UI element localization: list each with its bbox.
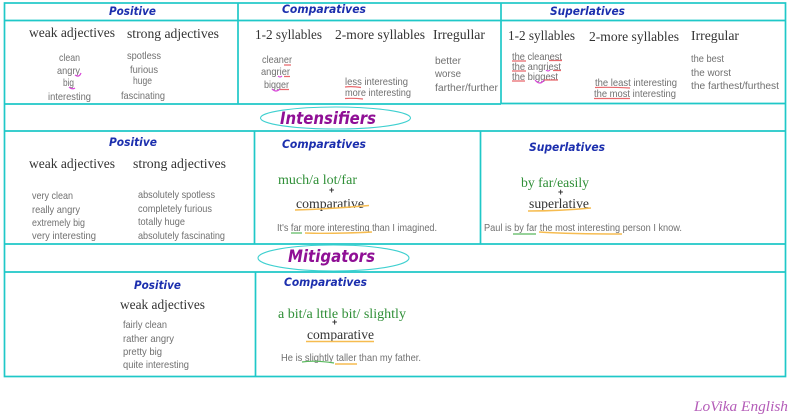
long comparatives list: more interesting — [345, 87, 411, 99]
formula: a bit a little bit slightly plus comparative: a bit/a lttle bit/ slightly — [278, 306, 406, 321]
heading: positive: Positive — [109, 135, 157, 149]
column heads: syllables and irregular — [508, 28, 740, 44]
title: mitigators — [258, 245, 409, 271]
example sentence: It's far more interesting than I imagined. — [277, 222, 437, 234]
heading: comparatives: Comparatives — [284, 275, 367, 289]
panel: intensifiers superlatives — [484, 140, 682, 234]
heading: positive: Positive — [134, 278, 181, 292]
heading: superlatives: Superlatives — [529, 140, 605, 154]
mitigated adjectives list: fairly clean — [123, 319, 167, 331]
long superlatives list: the least interesting — [595, 77, 677, 89]
column heads: syllables and irregular: 1-2 syllables — [508, 28, 575, 43]
short superlatives list: the cleanest — [512, 51, 562, 63]
intensified strong adjectives list: totally huge — [138, 216, 185, 228]
formula: by far easily plus superlative — [521, 175, 591, 211]
panel: intensifiers positive — [29, 135, 226, 242]
column heads: syllables and irregular: 2-more syllables — [589, 29, 679, 44]
intensified weak adjectives list: very interesting — [32, 230, 96, 242]
short superlatives list: the biggest — [512, 71, 558, 83]
long superlatives list — [594, 77, 677, 100]
intensified strong adjectives list: absolutely fascinating — [138, 230, 225, 242]
irregular comparatives list: farther/further — [435, 82, 498, 94]
formula: by far easily plus superlative: superlative — [529, 196, 589, 211]
strong adjectives list: spotless — [127, 50, 161, 62]
irregular comparatives list: worse — [434, 68, 461, 80]
panel: intensifiers comparatives — [277, 137, 437, 234]
formula: by far easily plus superlative: by far/easily — [521, 175, 589, 190]
heading: superlatives: Superlatives — [550, 4, 625, 18]
brand signature: LoVika English — [693, 399, 788, 415]
example sentence: He is slightly taller than my father. — [281, 352, 421, 364]
intensified strong adjectives list: completely furious — [138, 203, 212, 215]
panel: mitigators comparatives — [278, 275, 421, 364]
strong adjectives list: huge — [133, 75, 152, 87]
mitigated adjectives list: rather angry — [123, 333, 175, 345]
irregular comparatives list: better — [435, 55, 461, 67]
irregular comparatives list — [434, 55, 498, 94]
formula: much a lot far plus comparative: + — [329, 185, 334, 195]
intensified strong adjectives list: absolutely spotless — [138, 189, 215, 201]
long superlatives list: the most interesting — [594, 88, 676, 100]
heading: comparatives: Comparatives — [282, 137, 366, 151]
formula: by far easily plus superlative: + — [558, 187, 563, 197]
irregular superlatives list — [691, 53, 779, 92]
irregular superlatives list: the worst — [691, 67, 731, 79]
column heads: syllables and irregular: Irregular — [691, 28, 740, 43]
short comparatives list — [261, 54, 292, 91]
formula: much a lot far plus comparative — [278, 172, 369, 211]
intensified strong adjectives list — [138, 189, 225, 242]
column heads: weak and strong adjectives — [29, 25, 219, 41]
short comparatives list: cleaner — [262, 54, 292, 66]
column heads: weak and strong adjectives: strong adjectives — [127, 26, 219, 41]
heading: comparatives: Comparatives — [282, 2, 366, 16]
mitigated adjectives list: pretty big — [123, 346, 162, 358]
panel: top row positive — [29, 4, 219, 103]
mitigated adjectives list: quite interesting — [123, 359, 189, 371]
panel: top row comparatives — [255, 2, 498, 99]
column heads: weak and strong adjectives: strong adjectives — [133, 156, 226, 171]
column heads: syllables and irregular: 1-2 syllables — [255, 27, 322, 42]
title: intensifiers — [260, 107, 410, 129]
formula: much a lot far plus comparative: comparative — [296, 196, 364, 211]
irregular superlatives list: the farthest/furthest — [691, 80, 779, 92]
formula: a bit a little bit slightly plus comparative: + — [332, 317, 337, 327]
formula: a bit a little bit slightly plus comparative: comparative — [307, 327, 374, 342]
weak adjectives list: angry — [57, 65, 81, 77]
short superlatives list — [512, 51, 562, 83]
short superlatives list: the angriest — [512, 61, 561, 73]
column heads: weak and strong adjectives — [29, 156, 226, 171]
weak adjectives list: clean — [59, 52, 80, 64]
weak adjectives list: interesting — [48, 91, 91, 103]
column heads: syllables and irregular — [255, 27, 486, 42]
strong adjectives list: fascinating — [121, 90, 165, 102]
column heads: syllables and irregular: Irregullar — [433, 27, 486, 42]
short comparatives list: angrier — [261, 66, 290, 78]
column heads: weak and strong adjectives: weak adjectives — [29, 25, 115, 40]
column heads: syllables and irregular: 2-more syllables — [335, 27, 425, 42]
intensified weak adjectives list: extremely big — [32, 217, 85, 229]
long comparatives list — [345, 76, 411, 99]
intensified weak adjectives list — [32, 190, 96, 242]
intensified weak adjectives list: very clean — [32, 190, 73, 202]
column head: weak adjectives: weak adjectives — [120, 297, 205, 312]
weak adjectives list — [48, 52, 91, 103]
short comparatives list: bigger — [264, 79, 289, 91]
example sentence: Paul is by far the most interesting person I know. — [484, 222, 682, 234]
mitigated adjectives list — [123, 319, 189, 371]
column heads: weak and strong adjectives: weak adjectives — [29, 156, 115, 171]
formula: much a lot far plus comparative: much/a lot/far — [278, 172, 358, 187]
strong adjectives list — [121, 50, 165, 102]
intensified weak adjectives list: really angry — [32, 204, 81, 216]
weak adjectives list: big — [63, 77, 74, 89]
title: mitigators: Mitigators — [288, 247, 375, 266]
long comparatives list: less interesting — [345, 76, 408, 88]
heading: positive: Positive — [109, 4, 156, 18]
panel: top row superlatives — [508, 4, 779, 100]
irregular superlatives list: the best — [691, 53, 724, 65]
formula: a bit a little bit slightly plus comparative — [278, 306, 406, 342]
panel: mitigators positive — [120, 278, 205, 371]
title: intensifiers: Intensifiers — [280, 109, 376, 128]
strong adjectives list: furious — [130, 64, 158, 76]
